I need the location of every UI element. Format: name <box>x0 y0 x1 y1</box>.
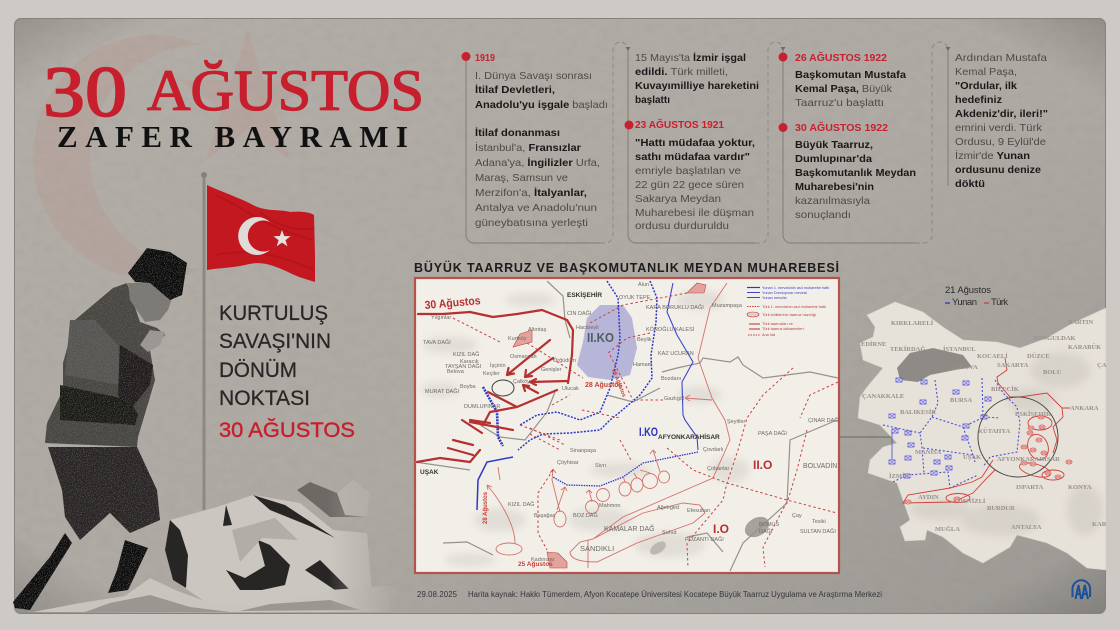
Turkish front lines <box>903 358 1070 503</box>
map labels: Altıntaş <box>528 327 547 333</box>
timeline column 1: 1919: güneybatısına yerleşti <box>475 217 588 229</box>
timeline column 3: 1922: Muharebesi'nin <box>795 181 874 193</box>
regional map legend <box>945 285 1008 308</box>
timeline column 2: 1921 <box>635 51 759 232</box>
province labels: SAKARYA <box>997 362 1029 369</box>
timeline column 1: 1919: Anadolu'yu işgale başladı <box>475 99 608 111</box>
timeline column 2: 1921: emriyle başlatılan ve <box>635 165 741 177</box>
province labels: KÜTAHYA <box>978 428 1010 435</box>
black oval at Çalköy <box>492 380 514 396</box>
map labels: SULTAN DAĞI <box>800 528 836 535</box>
timeline column 4: Izmir: Ardından Mustafa <box>955 52 1047 64</box>
timeline column 1: 1919: 1919 <box>475 52 495 64</box>
timeline column 3: 1922: kazanılmasıyla <box>795 195 870 207</box>
map labels: KÖROĞLU KALESİ <box>646 326 695 333</box>
map legend: Yunan Dumlupınar mevzisi <box>762 291 807 295</box>
map labels: POZANTI DAĞI <box>685 536 724 543</box>
land <box>858 302 1106 570</box>
title <box>43 52 424 154</box>
map labels: Genişler <box>541 367 562 373</box>
map labels: Karacık <box>460 359 479 365</box>
map base <box>415 278 839 573</box>
timeline column 4: Izmir: ordusunu denize <box>955 164 1041 176</box>
highlight circle <box>978 397 1058 477</box>
objective markers <box>513 283 706 568</box>
province labels: MANİSA <box>915 449 942 456</box>
trousers <box>48 447 160 540</box>
timeline column 4: Izmir: hedefiniz <box>955 94 1002 106</box>
map force labels: II.KO <box>587 330 614 345</box>
map labels: Kurtköy <box>508 336 527 342</box>
coat <box>45 283 165 447</box>
map legend: Yunan mevzisi <box>762 296 787 300</box>
side slogan text <box>219 302 355 442</box>
map labels <box>420 282 841 563</box>
map labels: PAŞA DAĞI <box>758 430 787 437</box>
portrait figure of Atatürk <box>13 248 187 610</box>
timeline column 1: 1919: Merzifon'a, İtalyanlar, <box>475 186 587 199</box>
map legend: Türk 1. mevzisinin asıl muharebe hattı <box>762 305 826 309</box>
map labels: Bozdanı <box>661 376 681 382</box>
timeline column 3: 1922 <box>795 51 916 221</box>
map labels: Gazlıgöl <box>664 396 684 402</box>
timeline column 1: 1919 <box>475 52 608 229</box>
icon: AA agency logo <box>1072 580 1090 599</box>
timeline column 1: 1919: Maraş, Samsun ve <box>475 172 568 184</box>
timeline column 1: 1919: Antalya ve Anadolu'nun <box>475 202 597 214</box>
map labels: AFYONKARAHİSAR <box>658 433 720 441</box>
province labels: ESKİŞEHİR <box>1015 411 1051 418</box>
Sea of Marmara <box>897 348 972 382</box>
map labels: Muzampaşa <box>712 303 743 309</box>
map source and date: 29.08.2025 <box>417 590 458 599</box>
map force labels <box>424 295 772 568</box>
province labels: ISPARTA <box>1016 484 1044 491</box>
province labels: DENİZLİ <box>958 498 986 505</box>
map labels: Keçiler <box>483 371 500 377</box>
timeline column 4: Izmir: Ordusu, 9 Eylül'de <box>955 136 1046 148</box>
map force labels: 28 Ağustos <box>610 369 627 398</box>
province labels: KARABÜK <box>1068 344 1101 351</box>
side slogan text: KURTULUŞ <box>219 302 328 325</box>
map labels: Sivrı <box>595 463 606 469</box>
map labels: İşçinin <box>490 362 506 369</box>
map force labels: 28 Ağustos <box>585 382 623 389</box>
province labels: BARTIN <box>1068 319 1093 326</box>
timeline column 3: 1922: 30 AĞUSTOS 1922 <box>795 121 888 134</box>
side slogan text: SAVAŞI'NIN <box>219 330 331 353</box>
map labels: Yılgınlar <box>431 315 451 321</box>
map labels: Efesultan <box>687 508 710 514</box>
province labels: TEKİRDAĞ <box>890 345 925 353</box>
title: ZAFER BAYRAMI <box>57 119 408 154</box>
map labels: Çovdarlı <box>703 447 723 453</box>
map labels: CİN DAĞI <box>567 310 592 317</box>
flag pole <box>201 172 207 510</box>
province labels: BOLU <box>1043 369 1062 376</box>
map force labels: I.KO <box>639 425 658 439</box>
timeline column 2: 1921: Sakarya Meydan <box>635 193 721 205</box>
province labels: UŞAK <box>963 454 981 461</box>
Greek front lines <box>883 378 1020 488</box>
Greek positions (blue lines) <box>477 281 698 510</box>
map force labels: 25 Ağustos <box>518 561 553 568</box>
timeline column 1: 1919: I. Dünya Savaşı sonrası <box>475 70 592 82</box>
timeline column 4: Izmir <box>955 52 1048 190</box>
map labels: TAVA DAĞI <box>423 339 451 346</box>
province labels: DÜZCE <box>1027 353 1050 360</box>
map labels: Alun <box>638 282 649 288</box>
roads <box>415 281 838 571</box>
map labels: Sinanpaşa <box>570 448 597 454</box>
map force labels: 30 Ağustos <box>424 295 481 312</box>
province labels: ANTALYA <box>1011 524 1042 531</box>
map labels: ÇINAR DAĞI <box>808 417 841 424</box>
map labels: BOZ DAĞ <box>573 512 598 519</box>
map labels: KAMALAR DAĞ <box>604 524 655 533</box>
head and hand <box>128 283 172 322</box>
timeline column 4: Izmir: döktü <box>955 178 985 190</box>
side slogan text: NOKTASI <box>219 387 310 410</box>
timeline column 2: 1921: 22 gün 22 gece süren <box>635 179 744 191</box>
map labels: Belova <box>447 369 465 375</box>
map labels: Çay <box>792 513 802 519</box>
title: AĞUSTOS <box>147 58 424 123</box>
map labels: Çalköy <box>513 379 530 385</box>
map heading: BÜYÜK TAARRUZ VE BAŞKOMUTANLIK MEYDAN MUHAREBESİ <box>414 260 839 275</box>
timeline column 4: Izmir: Kemal Paşa, <box>955 66 1017 78</box>
map legend: Türk birliklerinin taarruz hazırlığı <box>762 313 816 317</box>
Turkish units <box>905 415 1072 504</box>
regional map legend: Yunan <box>952 297 977 308</box>
timeline column 4: Izmir: "Ordular, ilk <box>955 80 1017 92</box>
timeline column 1: 1919: İtilaf Devletleri, <box>475 83 555 96</box>
boots <box>13 533 72 610</box>
map labels: UŞAK <box>420 469 439 476</box>
map labels: Örğüdüm <box>553 357 576 364</box>
timeline column 2: 1921: 15 Mayıs'ta İzmir işgal <box>635 51 746 64</box>
map legend: Yunan 1. mevzisinin asıl muharebe hattı <box>762 286 829 290</box>
timeline column 4: Izmir: İzmir'de Yunan <box>955 149 1030 162</box>
map legend: Türk taarruz istikametleri <box>762 327 804 331</box>
title: 30 <box>43 52 127 132</box>
battle map <box>415 278 841 573</box>
province labels: ÇANAKKALE <box>862 393 904 400</box>
map labels: BOLVADİN <box>803 461 837 470</box>
map labels: KARA BORUKLU DAĞI <box>646 304 704 311</box>
timeline column 3: 1922: Dumlupınar'da <box>795 153 872 165</box>
connector line to regional map <box>840 436 978 438</box>
map labels: SANDIKLI <box>580 544 614 553</box>
province labels: AFYONKARAHİSAR <box>997 456 1060 463</box>
map force labels: II.O <box>753 458 772 472</box>
regional map legend: 21 Ağustos <box>945 285 991 296</box>
province labels: BİLECİK <box>991 386 1019 393</box>
Greek units <box>889 378 991 478</box>
timeline column 3: 1922: Büyük Taarruz, <box>795 139 873 151</box>
map labels: KAZ UCURAN <box>658 351 694 357</box>
province labels: İSTANBUL <box>943 346 976 353</box>
timeline column 1: 1919: İtilaf donanması <box>475 126 560 139</box>
regional map legend: Türk <box>991 297 1008 308</box>
province labels: İZMİR <box>889 473 910 480</box>
timeline column 2: 1921: sathı müdafaa vardır" <box>635 151 750 163</box>
province labels: BALIKESİR <box>900 409 936 416</box>
map labels: Çöyhisar <box>557 460 579 466</box>
timeline column 3: 1922: sonuçlandı <box>795 209 851 221</box>
map labels: Boyba <box>460 384 477 390</box>
map labels: KIZIL DAĞ <box>508 501 534 508</box>
timeline column 3: 1922: Taarruz'u başlattı <box>795 97 884 109</box>
province labels: ZONGULDAK <box>1033 335 1076 342</box>
timeline column 2: 1921: ordusu durduruldu <box>635 220 729 232</box>
timeline column 3: 1922: Kemal Paşa, Büyük <box>795 83 893 95</box>
map labels: Çobanlar <box>707 466 729 472</box>
timeline column 3: 1922: Başkomutanlık Meydan <box>795 167 916 179</box>
land relief <box>910 352 1103 536</box>
map labels: TAYŞAN DAĞI <box>445 363 482 370</box>
regional map of western Anatolia <box>858 302 1120 570</box>
map labels: MURAT DAĞI <box>425 388 459 395</box>
flag <box>207 185 315 282</box>
Turkish thick attack arrows <box>417 310 573 462</box>
map labels: Şuhut <box>662 530 677 536</box>
map labels: DAĞI <box>759 528 773 535</box>
faint crescent and star emblem <box>33 30 316 279</box>
map labels: KIZIL DAĞ <box>453 351 479 358</box>
map labels: BOMUS <box>759 522 780 528</box>
province labels: EDİRNE <box>861 341 886 348</box>
province labels: AYDIN <box>918 494 939 501</box>
timeline column 2: 1921: Muharebesi ile düşman <box>635 207 754 219</box>
timeline column 2: 1921: "Hattı müdafaa yoktur, <box>635 137 755 149</box>
timeline column 4: Izmir: emrini verdi. Türk <box>955 122 1043 134</box>
side slogan text: 30 AĞUSTOS <box>219 419 355 442</box>
map labels: Başağaç <box>534 513 556 519</box>
map labels: Ulucak <box>562 386 579 392</box>
timeline column 1: 1919: İstanbul'a, Fransızlar <box>475 141 581 154</box>
red dashed lines <box>453 293 838 568</box>
map legend: Türk taarruzları ve <box>762 322 793 326</box>
timeline column 3: 1922: 26 AĞUSTOS 1922 <box>795 51 887 64</box>
map labels: Hacıbeyli <box>576 325 599 331</box>
province labels: ANKARA <box>1070 405 1099 412</box>
map legend: Ana hat <box>762 333 776 337</box>
map labels: OYUK TEPE <box>619 295 651 301</box>
map labels: Tesiki <box>812 519 826 525</box>
map labels: Ağırlıged <box>657 505 679 511</box>
map labels: Beylik <box>637 337 652 343</box>
timeline column 2: 1921: Kuvayımilliye hareketini <box>635 80 759 92</box>
map source and date: Harita kaynak: Hakkı Tümerdem, Afyon Kocatepe Üniversitesi Kocatepe Büyük Taarruz Uygulama ve Araştırma Merkezi <box>468 590 882 599</box>
timeline column 1: 1919: Adana'ya, İngilizler Urfa, <box>475 156 600 169</box>
province labels: YALOVA <box>951 364 978 371</box>
map force labels: I.O <box>713 522 729 536</box>
area: II.KO <box>577 305 637 380</box>
timeline column 2: 1921: 23 AĞUSTOS 1921 <box>635 118 724 131</box>
map labels: DUMLUPINAR <box>464 404 500 410</box>
province labels: BURSA <box>950 397 972 404</box>
timeline column 3: 1922: Başkomutan Mustafa <box>795 69 906 81</box>
timeline column 2: 1921: edildi. Türk milleti, <box>635 66 728 78</box>
province labels: BURDUR <box>987 505 1015 512</box>
map legend <box>747 286 829 337</box>
map labels: Mahmon <box>599 503 620 509</box>
timeline column 4: Izmir: Akdeniz'dir, ileri!" <box>955 108 1048 120</box>
rocks <box>33 479 400 612</box>
province labels: KOCAELİ <box>977 353 1008 360</box>
province labels: KONYA <box>1068 484 1092 491</box>
province labels <box>861 319 1120 533</box>
map labels: Osmanşah <box>510 354 537 360</box>
thin red manoeuvre lines and ovals <box>487 283 730 568</box>
timeline frames and connectors <box>462 42 950 243</box>
side slogan text: DÖNÜM <box>219 359 297 382</box>
map labels: Hamam <box>633 362 653 368</box>
map force labels: 28 Ağustos <box>483 491 489 524</box>
map labels: ESKİŞEHİR <box>567 291 602 299</box>
province labels: KIRKLARELİ <box>891 320 934 327</box>
map labels: Kadınısar <box>531 557 555 563</box>
province labels: MUĞLA <box>935 525 960 533</box>
map labels: Şeyitler <box>727 419 746 425</box>
timeline column 2: 1921: başlattı <box>635 94 670 106</box>
